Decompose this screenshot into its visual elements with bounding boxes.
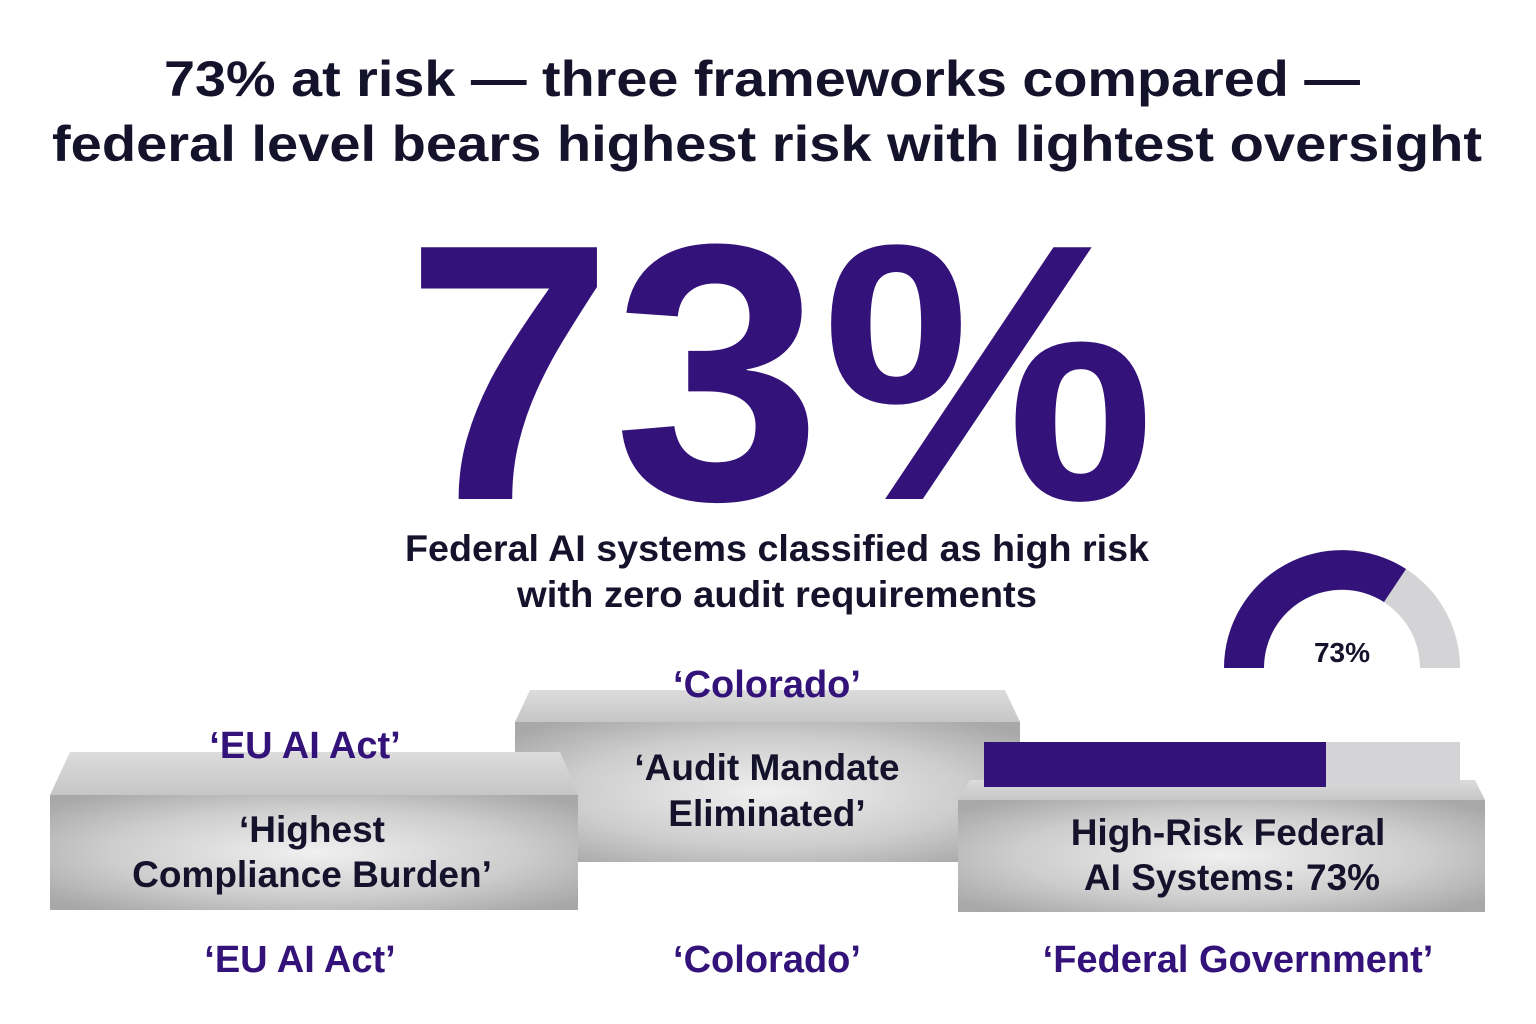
progress bar 73% (984, 742, 1460, 787)
block: EU AI Act: ‘EU AI Act’ (209, 725, 401, 767)
bottom labels: ‘Federal Government’ (1043, 939, 1433, 981)
block: Federal Government with bar (958, 742, 1485, 912)
block: Colorado (515, 664, 1020, 862)
bottom labels: ‘EU AI Act’ (204, 939, 396, 981)
title: 73% at risk — three frameworks compared — (164, 51, 1360, 107)
block: Colorado: ‘Audit Mandate (634, 747, 900, 788)
title: federal level bears highest risk with lightest oversight (52, 116, 1482, 172)
block: EU AI Act (50, 725, 578, 910)
block: EU AI Act: Compliance Burden’ (132, 854, 492, 895)
big stat 73%: 73% (405, 168, 1155, 577)
subtitle: Federal AI systems classified as high risk (405, 528, 1149, 569)
bottom labels: ‘Colorado’ (673, 939, 861, 981)
title (52, 51, 1482, 172)
block: Colorado: Eliminated’ (668, 793, 866, 834)
block: EU AI Act: ‘Highest (239, 809, 385, 850)
block: Federal Government with bar: AI Systems: 73% (1084, 857, 1380, 898)
block: Colorado: ‘Colorado’ (673, 664, 861, 706)
bottom labels (204, 939, 1433, 981)
subtitle (405, 528, 1149, 615)
gauge chart: 73% (1314, 637, 1370, 668)
gauge chart (1224, 550, 1460, 668)
block: Federal Government with bar: High-Risk Federal (1071, 812, 1385, 853)
subtitle: with zero audit requirements (516, 574, 1037, 615)
